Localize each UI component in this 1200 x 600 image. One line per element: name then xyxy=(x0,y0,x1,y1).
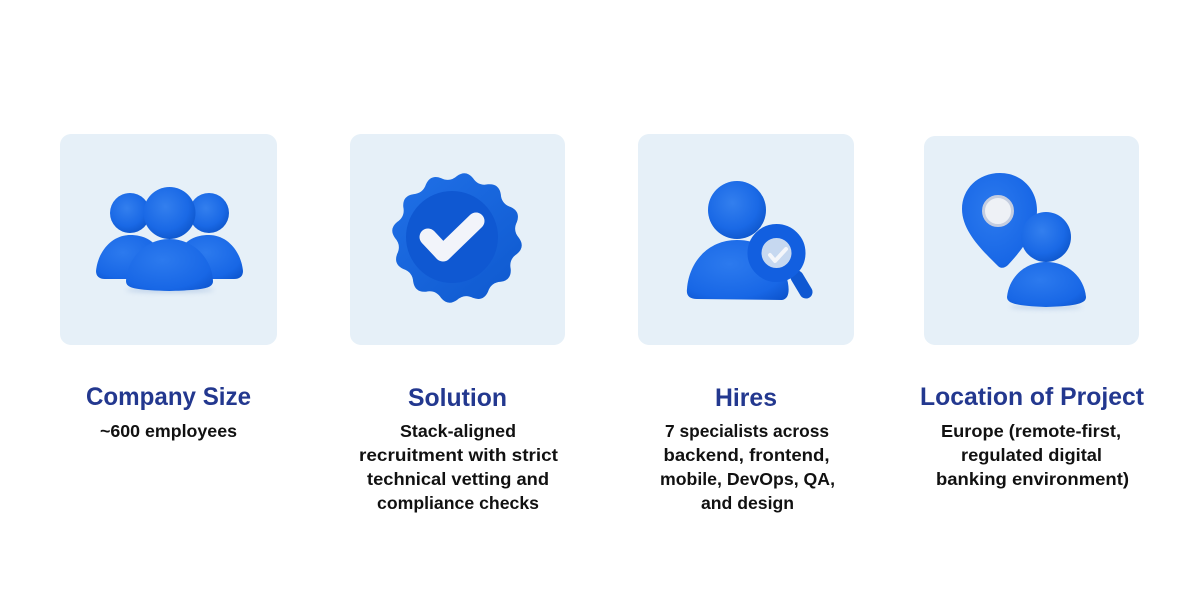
card: location of project xyxy=(920,136,1145,489)
heading: company size: Company Size xyxy=(86,383,251,411)
card: hires xyxy=(638,134,854,513)
heading: hires: Hires xyxy=(715,384,777,412)
text: solution detail: compliance checks xyxy=(377,493,539,513)
text: company size detail: ~600 employees xyxy=(100,421,237,441)
panel: hires xyxy=(638,134,854,345)
heading: solution: Solution xyxy=(408,384,507,412)
text: location detail: Europe (remote-first, xyxy=(941,421,1121,441)
text: hires detail: and design xyxy=(701,493,794,513)
panel: location of project xyxy=(924,136,1139,345)
text: hires detail: backend, frontend, xyxy=(664,445,830,465)
text: solution detail: Stack-aligned xyxy=(400,421,516,441)
icon: person with magnifying glass xyxy=(687,181,806,300)
text: hires detail: 7 specialists across xyxy=(665,421,829,441)
card: solution xyxy=(350,134,565,513)
text: location detail xyxy=(936,421,1129,489)
card: company size xyxy=(60,134,277,441)
heading: location of project: Location of Project xyxy=(920,383,1145,411)
text: solution detail: recruitment with strict xyxy=(359,445,558,465)
panel: solution xyxy=(350,134,565,345)
icon: group of three people xyxy=(96,187,243,293)
text: location detail: regulated digital xyxy=(961,445,1102,465)
text: solution detail xyxy=(359,421,558,513)
icon: map pin and person xyxy=(962,173,1086,310)
icon: verified badge with check xyxy=(392,173,522,303)
text: hires detail xyxy=(660,421,835,513)
panel: company size xyxy=(60,134,277,345)
text: solution detail: technical vetting and xyxy=(367,469,549,489)
text: location detail: banking environment) xyxy=(936,469,1129,489)
text: hires detail: mobile, DevOps, QA, xyxy=(660,469,835,489)
